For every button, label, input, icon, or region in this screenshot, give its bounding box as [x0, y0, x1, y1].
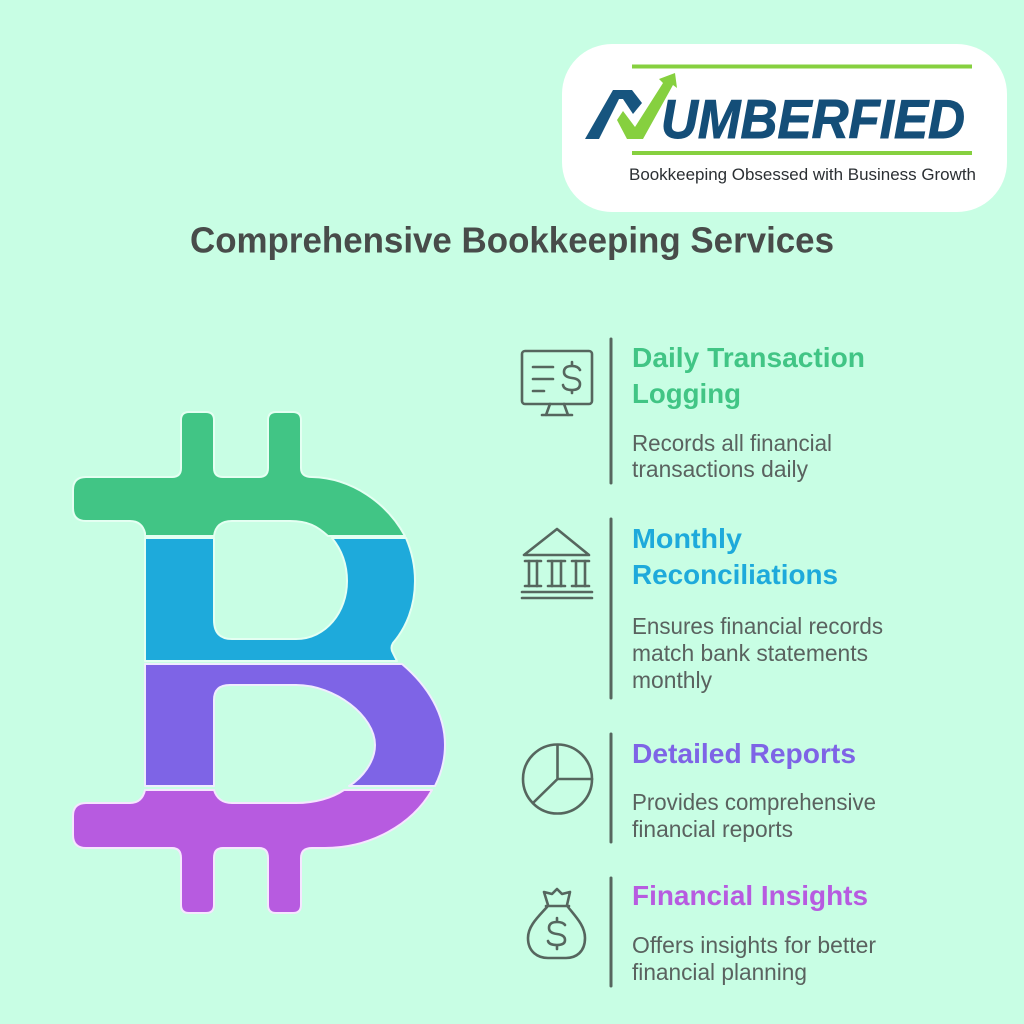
- text: monthly reconciliations description: monthly: [632, 667, 712, 693]
- divider line: [610, 339, 612, 483]
- heading: daily transaction logging: Logging: [632, 378, 741, 409]
- text: detailed reports description: financial reports: [632, 816, 793, 842]
- title: Comprehensive Bookkeeping Services: [190, 220, 834, 260]
- divider line: [610, 519, 612, 698]
- segment: blue: [145, 538, 415, 661]
- divider line: [610, 878, 612, 986]
- row: financial insights: [528, 878, 876, 986]
- icon: monitor with dollar: [522, 351, 592, 415]
- text: daily transaction description: transactions daily: [632, 456, 808, 482]
- text: financial insights description: financial planning: [632, 959, 807, 985]
- panel: logo card: UMBERFIED: [661, 88, 965, 150]
- panel: logo card: [562, 44, 1007, 212]
- text: detailed reports description: Provides comprehensive: [632, 789, 876, 815]
- divider line: [610, 734, 612, 842]
- heading: monthly reconciliations: Monthly: [632, 523, 742, 554]
- segment: purple: [145, 664, 445, 786]
- segment: green top: [73, 412, 405, 536]
- row: monthly reconciliations: [522, 519, 883, 698]
- icon: money bag: [528, 889, 585, 958]
- text: monthly reconciliations description: Ensures financial records: [632, 613, 883, 639]
- text: monthly reconciliations description: match bank statements: [632, 640, 868, 666]
- heading: monthly reconciliations: Reconciliations: [632, 559, 838, 590]
- heading: financial insights: Financial Insights: [632, 880, 868, 911]
- heading: detailed reports: Detailed Reports: [632, 738, 856, 769]
- text: financial insights description: Offers insights for better: [632, 932, 876, 958]
- chart: segmented bitcoin symbol: [73, 412, 445, 913]
- heading: daily transaction logging: Daily Transaction: [632, 342, 865, 373]
- icon: bank building: [522, 529, 592, 598]
- icon: pie chart: [523, 744, 592, 814]
- row: daily transaction logging: [522, 339, 865, 483]
- text: daily transaction description: Records all financial: [632, 430, 832, 456]
- row: detailed reports: [523, 734, 876, 842]
- segment: magenta bottom: [73, 790, 432, 913]
- panel: logo card: Bookkeeping Obsessed with Business Growth: [629, 166, 976, 184]
